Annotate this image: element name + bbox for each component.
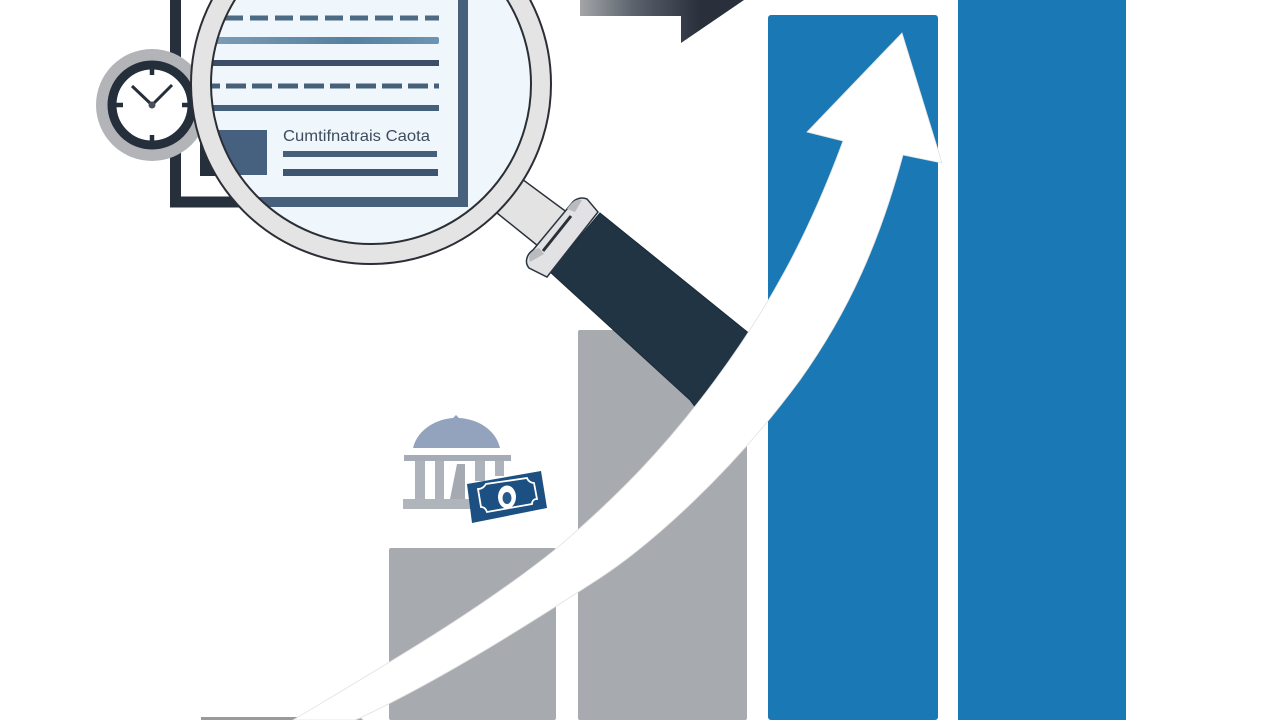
icon: banknote — [467, 471, 547, 523]
icon: magnifying glass — [170, 0, 760, 412]
icon: dark top arrow — [580, 0, 744, 43]
bar: blue — [768, 15, 938, 720]
baseline stub — [201, 717, 366, 720]
icon: clock — [96, 49, 208, 161]
growth arrow — [293, 33, 942, 720]
magnifier handle — [550, 213, 760, 412]
icon: document — [176, 0, 464, 202]
bar chart — [389, 0, 1126, 720]
magnified document — [212, 0, 468, 207]
document caption: Cumtifnatrais Caota — [283, 128, 430, 145]
bar: tallest blue — [958, 0, 1126, 720]
lens — [211, 0, 531, 244]
icon: bank building — [403, 415, 511, 509]
bar: tall grey — [578, 330, 747, 720]
magnifier collar — [526, 198, 598, 277]
magnifier neck — [497, 179, 568, 250]
bar: short grey — [389, 548, 556, 720]
magnifier ring — [201, 0, 541, 254]
